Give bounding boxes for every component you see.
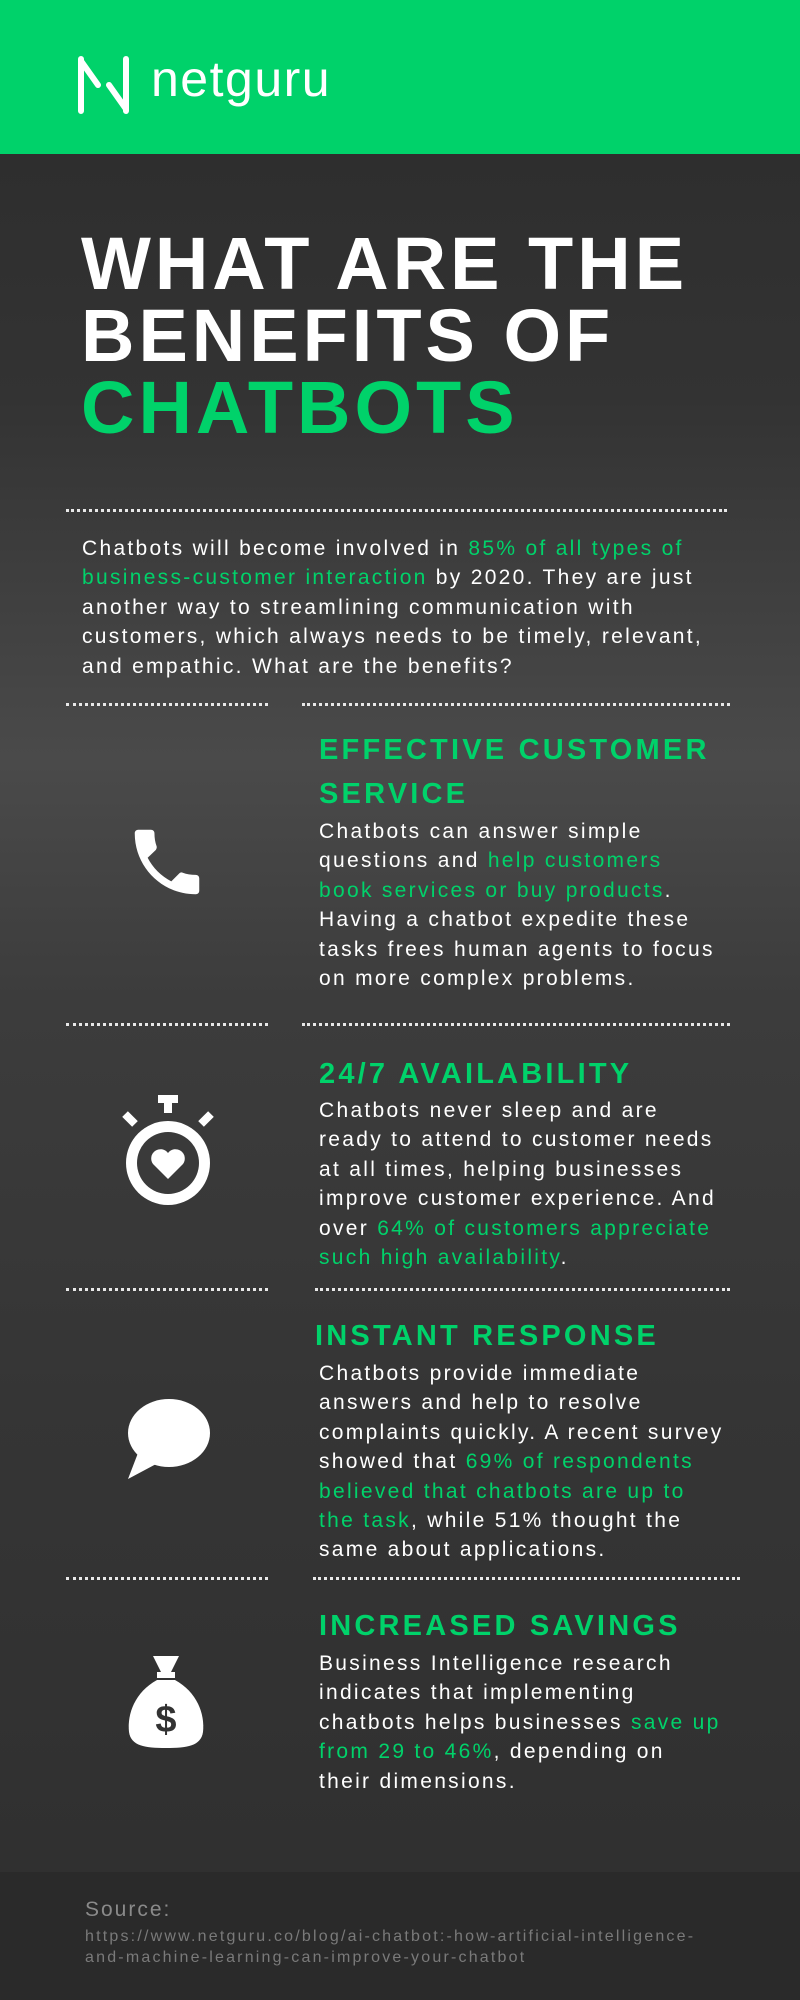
source label: Source: [85, 1898, 171, 1921]
section 2 body: such high availability. [319, 1246, 569, 1269]
section 3 body: Chatbots provide immediate [319, 1362, 640, 1385]
logo [78, 51, 331, 114]
footer [0, 1872, 800, 2000]
header bar [0, 0, 800, 154]
intro paragraph [82, 537, 703, 678]
section 2 body: ready to attend to customer needs [319, 1128, 714, 1151]
icon: phone [134, 830, 200, 894]
section 3 heading: INSTANT RESPONSE [315, 1320, 659, 1352]
section 2 body: Chatbots never sleep and are [319, 1099, 659, 1122]
section 4 body: Business Intelligence research [319, 1652, 673, 1675]
icon: netguru N [78, 56, 129, 114]
section 3 body: showed that 69% of respondents [319, 1450, 694, 1473]
section 4 body: indicates that implementing [319, 1681, 636, 1704]
section 3 body: answers and help to resolve [319, 1391, 643, 1414]
section 1 body: Having a chatbot expedite these [319, 908, 690, 931]
title: WHAT ARE THE [81, 222, 688, 305]
logo text: netguru [151, 51, 331, 107]
intro paragraph: another way to streamlining communication with [82, 596, 635, 619]
intro paragraph: customers, which always needs to be timely, relevant, [82, 625, 703, 648]
icon: speech bubble [128, 1399, 210, 1479]
section 2 heading: 24/7 AVAILABILITY [319, 1058, 632, 1090]
icon: money bag [128, 1656, 204, 1748]
section 3 body: believed that chatbots are up to [319, 1480, 686, 1503]
source url: and-machine-learning-can-improve-your-chatbot [85, 1949, 526, 1966]
title: BENEFITS OF [81, 294, 614, 377]
section 2 body: at all times, helping businesses [319, 1158, 683, 1181]
section 3 body: the task, while 51% thought the [319, 1509, 682, 1532]
section 1 body [319, 820, 715, 990]
section 4 body: from 29 to 46%, depending on [319, 1740, 665, 1763]
section 4 body: their dimensions. [319, 1770, 517, 1793]
intro paragraph: and empathic. What are the benefits? [82, 655, 514, 678]
source url: https://www.netguru.co/blog/ai-chatbot:-how-artificial-intelligence- [85, 1928, 695, 1945]
section 4 body: chatbots helps businesses save up [319, 1711, 721, 1734]
section 3 body [319, 1362, 724, 1561]
section 1 body: questions and help customers [319, 849, 662, 872]
section 1 body: on more complex problems. [319, 967, 636, 990]
intro paragraph: Chatbots will become involved in 85% of all types of [82, 537, 684, 560]
section 3 body: same about applications. [319, 1538, 607, 1561]
section 4 heading: INCREASED SAVINGS [319, 1610, 681, 1642]
section 2 body [319, 1099, 716, 1269]
intro paragraph: business-customer interaction by 2020. They are just [82, 566, 694, 589]
section 4 body [319, 1652, 721, 1793]
section 2 body: over 64% of customers appreciate [319, 1217, 711, 1240]
section 1 body: Chatbots can answer simple [319, 820, 643, 843]
section 1 heading [319, 734, 710, 810]
section 3 body: complaints quickly. A recent survey [319, 1421, 724, 1444]
section 1 heading: SERVICE [319, 778, 468, 810]
section 2 body: improve customer experience. And [319, 1187, 716, 1210]
section 1 heading: EFFECTIVE CUSTOMER [319, 734, 710, 766]
section 1 body: book services or buy products. [319, 879, 673, 902]
icon: stopwatch [122, 1095, 214, 1205]
source url [85, 1928, 695, 1966]
title: CHATBOTS [81, 366, 519, 449]
icon: money bag: $ [155, 1699, 177, 1741]
section 1 body: tasks frees human agents to focus [319, 938, 715, 961]
title [81, 222, 688, 449]
